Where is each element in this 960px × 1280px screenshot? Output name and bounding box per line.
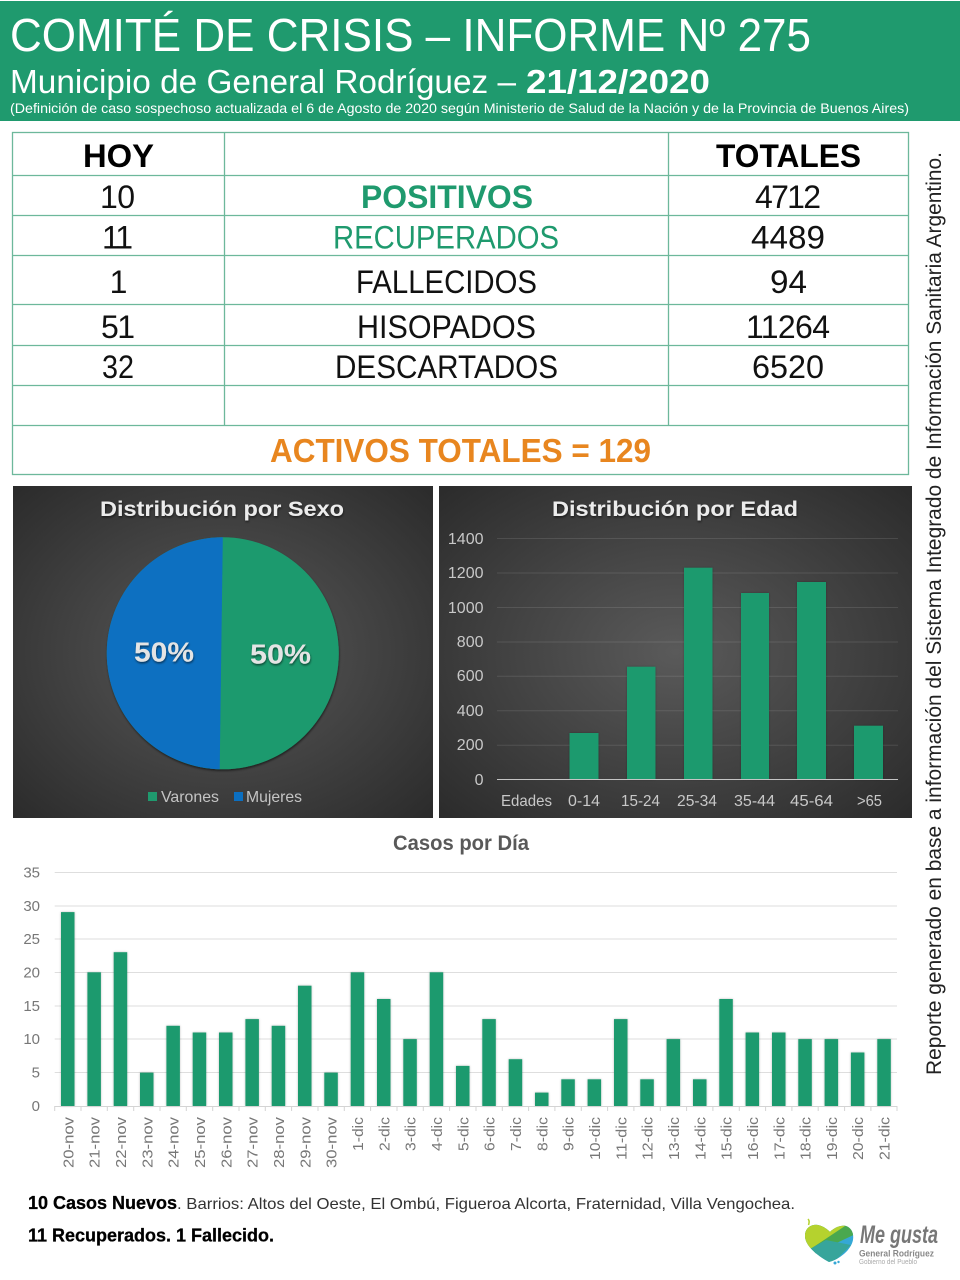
age x axis: 0-14 [568, 793, 600, 810]
age x axis: 35-44 [734, 793, 775, 810]
row: recuperados [102, 220, 825, 256]
age chart title: Distribución por Edad [552, 498, 798, 521]
daily x axis dates: 25-nov [192, 1116, 209, 1168]
pie legend: Varones [161, 789, 219, 806]
daily x axis dates: 15-dic [719, 1116, 736, 1160]
daily x axis dates: 4-dic [429, 1116, 446, 1151]
daily x axis dates: 29-nov [297, 1116, 314, 1168]
daily x axis dates: 13-dic [666, 1116, 683, 1160]
daily x axis dates: 5-dic [455, 1116, 472, 1151]
row: positivos: POSITIVOS [361, 179, 533, 215]
daily x axis dates: 28-nov [271, 1116, 288, 1168]
column heading: hoy: HOY [83, 138, 154, 174]
row: fallecidos [110, 264, 807, 300]
daily x axis dates: 21-dic [877, 1116, 894, 1160]
daily x axis dates: 30-nov [324, 1116, 341, 1168]
pie legend: Mujeres [246, 789, 302, 806]
age y axis: 200 [457, 737, 484, 754]
pie label: mujeres: 50% [134, 637, 194, 668]
row: hisopados: HISOPADOS [357, 309, 536, 345]
row: descartados [102, 349, 824, 385]
daily x axis dates: 7-dic [508, 1116, 525, 1151]
daily x axis dates: 6-dic [482, 1116, 499, 1151]
daily chart title: Casos por Día [393, 832, 529, 855]
panel: distribution by age [439, 486, 912, 818]
age x axis [501, 793, 882, 810]
pie title: Distribución por Sexo [100, 498, 344, 521]
statistics table [12, 132, 908, 474]
age y axis: 1200 [448, 565, 484, 582]
new cases line: 10 Casos Nuevos [28, 1193, 177, 1213]
daily x axis dates: 20-nov [60, 1116, 77, 1168]
age y axis: 400 [457, 703, 484, 720]
daily y axis: 30 [23, 898, 40, 915]
daily x axis dates: 18-dic [798, 1116, 815, 1160]
daily y axis: 5 [32, 1064, 40, 1082]
panel: cases per day [23, 832, 897, 1168]
age y axis: 800 [457, 634, 484, 651]
row: fallecidos: 1 [110, 264, 127, 300]
header banner [0, 1, 960, 121]
daily x axis dates: 27-nov [245, 1116, 262, 1168]
daily y axis: 10 [23, 1031, 40, 1048]
age x axis: Edades [501, 793, 552, 810]
new cases line [28, 1193, 795, 1213]
row: recuperados: RECUPERADOS [333, 220, 559, 256]
subtitle with date: Municipio de General Rodríguez – [10, 63, 517, 100]
active totals: ACTIVOS TOTALES = 129 [270, 432, 651, 469]
age y axis: 1000 [448, 600, 484, 617]
daily x axis dates: 23-nov [139, 1116, 156, 1168]
row: fallecidos: FALLECIDOS [356, 264, 537, 300]
subtitle with date: 21/12/2020 [526, 63, 710, 100]
row: fallecidos: 94 [770, 264, 807, 300]
pie legend [148, 789, 302, 806]
age x axis: >65 [857, 793, 882, 810]
age y axis: 0 [475, 772, 484, 789]
row: hisopados [101, 309, 830, 345]
row: positivos: 10 [100, 179, 135, 215]
age y axis: 600 [457, 668, 484, 685]
daily x axis dates: 10-dic [587, 1116, 604, 1160]
daily x axis dates: 9-dic [561, 1116, 578, 1151]
daily x axis dates: 16-dic [745, 1116, 762, 1160]
daily x axis dates: 8-dic [534, 1116, 551, 1151]
column heading: totales: TOTALES [716, 138, 861, 174]
daily x axis dates: 24-nov [166, 1116, 183, 1168]
pie chart [107, 537, 339, 769]
daily x axis dates: 12-dic [640, 1116, 657, 1160]
daily x axis dates: 2-dic [376, 1116, 393, 1151]
age y axis: 1400 [448, 531, 484, 548]
daily y axis: 35 [23, 864, 40, 882]
daily y axis: 20 [23, 964, 40, 982]
icon: heart [805, 1218, 854, 1264]
daily y axis: 25 [23, 931, 40, 948]
daily x axis dates: 17-dic [771, 1116, 788, 1160]
age bar chart [570, 568, 883, 780]
case definition note: (Definición de caso sospechoso actualizada el 6 de Agosto de 2020 según Ministerio de Salud de la Nación y de la Provincia de Buenos Aires) [10, 100, 909, 116]
daily x axis dates: 1-dic [350, 1116, 367, 1151]
age x axis: 15-24 [621, 793, 660, 810]
footer summary [28, 1193, 795, 1246]
daily x axis dates [60, 1116, 894, 1168]
daily bar chart [61, 912, 891, 1106]
daily x axis dates: 11-dic [613, 1116, 630, 1160]
row: positivos [100, 179, 821, 215]
logo tagline: Gobierno del Pueblo [859, 1259, 917, 1266]
row: descartados: 32 [102, 349, 134, 385]
daily y axis [23, 864, 40, 1115]
age x axis: 25-34 [677, 793, 717, 810]
recovered and deaths line: 11 Recuperados. 1 Fallecido. [28, 1226, 274, 1246]
new cases line: . Barrios: Altos del Oeste, El Ombú, Figueroa Alcorta, Fraternidad, Villa Vengochea. [177, 1196, 795, 1213]
age x axis: 45-64 [790, 793, 833, 810]
row: recuperados: 4489 [751, 220, 825, 256]
logo municipality name: General Rodríguez [859, 1248, 934, 1260]
row: recuperados: 11 [102, 220, 133, 256]
daily x axis dates: 20-dic [850, 1116, 867, 1160]
daily x axis dates: 19-dic [824, 1116, 841, 1160]
daily x axis dates: 26-nov [218, 1116, 235, 1168]
row: hisopados: 11264 [746, 309, 830, 345]
logo: me gusta general rodriguez [800, 1219, 938, 1266]
row: descartados: DESCARTADOS [335, 349, 558, 385]
row: descartados: 6520 [752, 349, 824, 385]
panel: distribution by sex [13, 486, 433, 818]
daily x axis dates: 3-dic [403, 1116, 420, 1151]
daily x axis dates: 21-nov [87, 1116, 104, 1168]
daily y axis: 15 [23, 998, 40, 1015]
age y axis [448, 531, 484, 789]
row: hisopados: 51 [101, 309, 135, 345]
pie label: varones: 50% [250, 639, 311, 670]
title: COMITÉ DE CRISIS – INFORME Nº 275 [10, 9, 811, 61]
daily x axis dates: 14-dic [692, 1116, 709, 1160]
vertical source note: Reporte generado en base a información del Sistema Integrado de Información Sanitaria Argentino. [923, 152, 946, 1075]
row: positivos: 4712 [755, 179, 821, 215]
daily y axis: 0 [32, 1098, 40, 1115]
daily x axis dates: 22-nov [113, 1116, 130, 1168]
